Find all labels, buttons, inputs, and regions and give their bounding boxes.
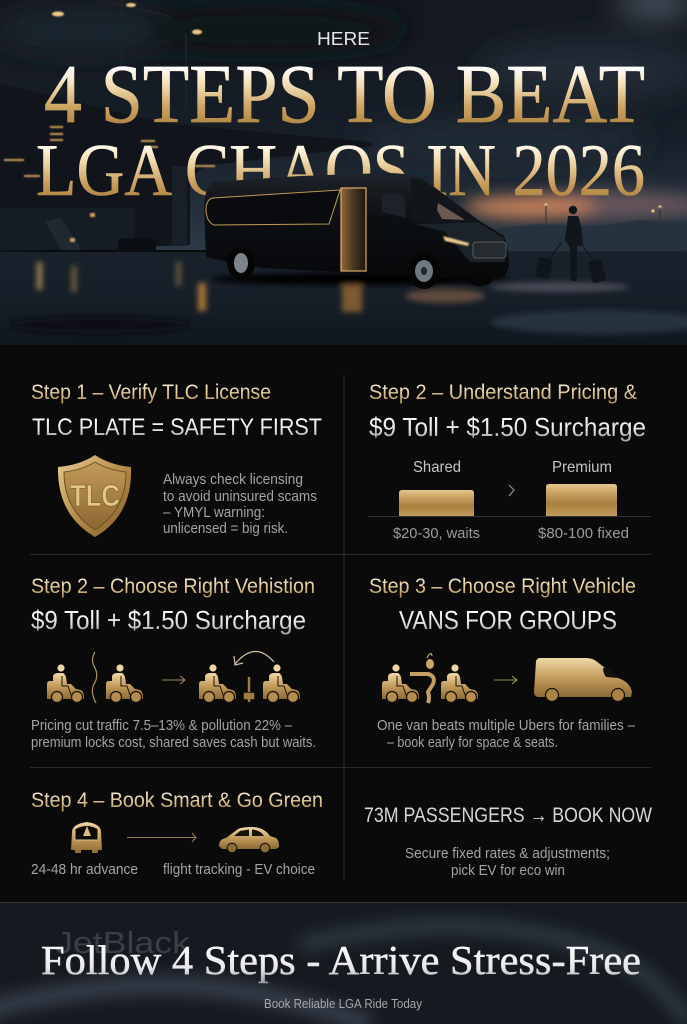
van body bbox=[204, 173, 509, 278]
title eyebrow: HERE bbox=[317, 29, 370, 49]
van grille bbox=[473, 242, 506, 258]
storm clouds bbox=[0, 0, 687, 160]
arrow bbox=[127, 833, 196, 842]
van hood highlight bbox=[415, 222, 505, 262]
step 1 body text: to avoid uninsured scams bbox=[163, 488, 317, 505]
pricing subheading: $9 Toll + $1.50 Surcharge bbox=[369, 412, 646, 442]
terminal building bbox=[0, 84, 372, 256]
van headlight bbox=[443, 236, 469, 246]
step 1 body text: – YMYL warning: bbox=[163, 504, 265, 521]
body text bbox=[31, 717, 316, 751]
footer headline: Follow 4 Steps - Arrive Stress-Free bbox=[41, 937, 641, 983]
panel: step 2 choose right vehistion bbox=[31, 575, 316, 751]
wet ground bbox=[0, 252, 687, 345]
footer call to action: Book Reliable LGA Ride Today bbox=[264, 997, 423, 1011]
panel grid dividers bbox=[30, 375, 651, 880]
sky bbox=[0, 0, 687, 250]
van door glow bbox=[341, 188, 366, 271]
panel: footer banner bbox=[0, 902, 687, 1024]
van windshield bbox=[411, 179, 478, 224]
step 1 body text bbox=[163, 471, 317, 537]
distant city strip bbox=[480, 220, 687, 252]
step 4 heading: Step 4 – Book Smart & Go Green bbox=[31, 789, 323, 812]
van windows bbox=[206, 190, 340, 225]
step 1 heading: Step 1 – Verify TLC License bbox=[31, 381, 271, 404]
chevron bbox=[509, 485, 514, 496]
toll subheading: $9 Toll + $1.50 Surcharge bbox=[31, 605, 306, 635]
body text: – book early for space & seats. bbox=[387, 734, 558, 751]
body text: One van beats multiple Ubers for families – bbox=[377, 717, 636, 734]
callout text: Secure fixed rates & adjustments; bbox=[405, 845, 610, 862]
icon: electric car bbox=[219, 827, 279, 853]
icon: booking vehicle front bbox=[71, 822, 102, 853]
value: premium: $80-100 fixed bbox=[538, 525, 629, 542]
step 3 heading: Step 3 – Choose Right Vehicle bbox=[369, 575, 636, 598]
panel: step 3 choose right vehicle bbox=[369, 575, 636, 751]
step 3 subheading: VANS FOR GROUPS bbox=[399, 605, 617, 635]
pricing bar chart bbox=[368, 459, 651, 542]
icon row: traffic before and after bbox=[47, 651, 300, 703]
lamp posts bbox=[52, 0, 662, 240]
step 1 subheading: TLC PLATE = SAFETY FIRST bbox=[32, 414, 322, 441]
panel: step 4 book smart bbox=[31, 789, 323, 878]
label: shared: Shared bbox=[413, 459, 461, 476]
label: premium: Premium bbox=[552, 459, 612, 476]
terminal lights bbox=[4, 126, 215, 242]
callout text bbox=[405, 845, 610, 879]
panel: step 2 understand pricing bbox=[368, 381, 651, 542]
van bbox=[204, 173, 509, 289]
panel: book now callout bbox=[364, 804, 652, 879]
icon: gold van bbox=[534, 658, 632, 702]
icon: TLC shield: TLC bbox=[70, 478, 120, 513]
hero photo: airport van at dusk bbox=[0, 0, 687, 345]
booking note: 24-48 hr advance bbox=[31, 861, 138, 878]
callout text: pick EV for eco win bbox=[451, 862, 565, 879]
icon: group in carts bbox=[382, 653, 478, 703]
footer background bbox=[0, 903, 687, 1024]
value: shared: $20-30, waits bbox=[393, 525, 480, 542]
ground reflections bbox=[10, 262, 687, 334]
pricing heading: Step 2 – Understand Pricing & bbox=[369, 381, 637, 404]
bar: shared bbox=[399, 490, 474, 516]
body text: premium locks cost, shared saves cash but waits. bbox=[31, 734, 316, 751]
baseline bbox=[368, 516, 651, 518]
vehistion heading: Step 2 – Choose Right Vehistion bbox=[31, 575, 315, 598]
title bbox=[38, 66, 644, 196]
footer swooshes bbox=[0, 926, 687, 1024]
sunset horizon glow bbox=[465, 191, 687, 219]
panel: step 1 verify license bbox=[31, 381, 322, 537]
bar: premium bbox=[546, 484, 617, 516]
step 1 body text: Always check licensing bbox=[163, 471, 303, 488]
icon: TLC shield bbox=[58, 455, 131, 537]
traveller with suitcases bbox=[535, 206, 606, 283]
arrow bbox=[494, 676, 517, 684]
van wheels bbox=[227, 247, 492, 289]
step 1 body text: unlicensed = big risk. bbox=[163, 520, 288, 537]
tracking note: flight tracking - EV choice bbox=[163, 861, 315, 878]
body text: Pricing cut traffic 7.5–13% & pollution 22% – bbox=[31, 717, 293, 734]
body text bbox=[377, 717, 636, 751]
ghost wordmark: JetBlack bbox=[55, 925, 191, 960]
